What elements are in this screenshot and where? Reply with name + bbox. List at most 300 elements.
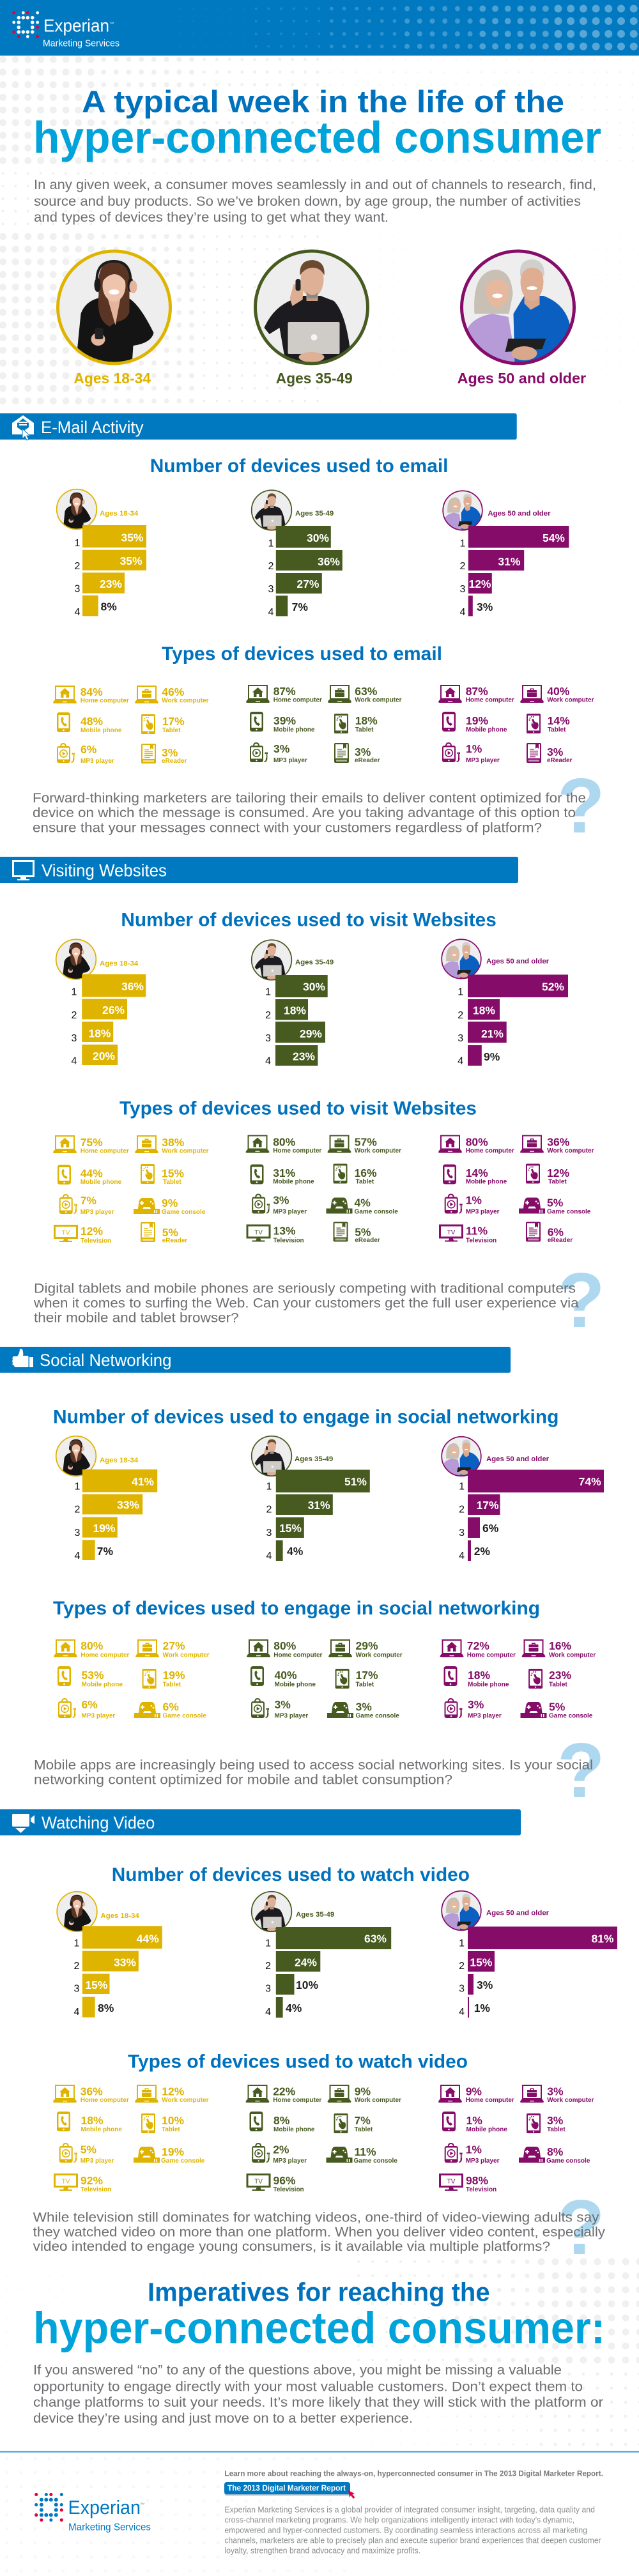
footer about text: loyalty, strengthen brand advocacy and maximize profits. <box>224 2547 420 2556</box>
bar chart: websites, ages 50 and older: 18% <box>473 1004 495 1017</box>
bar chart: video, ages 35-49: 3 <box>265 1984 271 1995</box>
mobile phone 8%: Mobile phone <box>273 2126 315 2133</box>
bar chart: email, ages 50 and older: 4 <box>460 607 466 618</box>
heading: imperatives: Imperatives for reaching the <box>148 2277 490 2306</box>
game console 9% <box>134 1197 206 1216</box>
tablet 18%: Tablet <box>355 726 374 733</box>
work computer 38% <box>135 1135 209 1155</box>
heading: number of devices used to engage in social networking: Number of devices used to engage in social networking <box>53 1407 558 1428</box>
television 12%: 12% <box>81 1225 103 1238</box>
bar chart: social, ages 50 and older: 17% <box>477 1499 499 1512</box>
home computer 87%: 87% <box>273 685 296 698</box>
footer logo: Marketing Services <box>68 2522 151 2533</box>
bar chart: social, ages 18-34 <box>56 1436 157 1561</box>
section banner: visiting websites <box>0 857 518 883</box>
bar chart: social, ages 50 and older: 1 <box>459 1481 465 1492</box>
footer call to action <box>224 2469 603 2499</box>
bar chart: email, ages 18-34: 1 <box>75 538 81 549</box>
work computer 38%: Work computer <box>162 1148 209 1155</box>
tablet 19% <box>142 1669 185 1689</box>
mobile phone 39%: 39% <box>273 714 296 727</box>
television 11%: TV <box>447 1229 456 1236</box>
home computer 72% <box>440 1639 516 1659</box>
work computer 36%: Work computer <box>547 1147 594 1154</box>
bar chart: email, ages 50 and older: 3% <box>477 601 493 613</box>
television 12% <box>54 1225 111 1245</box>
MP3 player 1% <box>445 1193 500 1215</box>
game console 6%: 6% <box>162 1701 179 1713</box>
mobile phone 18%: 18% <box>81 2114 104 2127</box>
work computer 57%: 57% <box>355 1136 377 1149</box>
section banner: e-mail activity <box>0 413 517 440</box>
bar chart: websites, ages 35-49: 18% <box>284 1004 306 1017</box>
work computer 9% <box>327 2085 401 2104</box>
work computer 3%: Work computer <box>547 2097 594 2104</box>
mobile phone 53%: Mobile phone <box>82 1682 123 1688</box>
callout: websites question: Digital tablets and mobile phones are seriously competing with traditional computers <box>34 1280 576 1296</box>
icon: video camera <box>12 1814 35 1833</box>
text block: imperatives: opportunity to engage directly with your most valuable customers. Don’t expect them to <box>33 2379 583 2394</box>
work computer 29% <box>328 1639 403 1659</box>
tablet 18%: 18% <box>355 714 378 727</box>
MP3 player 2%: MP3 player <box>273 2158 307 2165</box>
bar chart: social, ages 18-34: Ages 18-34 <box>100 1457 139 1464</box>
callout: email question: ? <box>557 762 605 849</box>
bar chart: video, ages 35-49: 63% <box>364 1932 387 1945</box>
television 98% <box>439 2174 497 2193</box>
game console 8%: Game console <box>546 2158 590 2165</box>
work computer 29%: 29% <box>355 1639 378 1652</box>
MP3 player 5% <box>59 2143 114 2165</box>
MP3 player 1% <box>445 2143 500 2165</box>
bar chart: video, ages 50 and older: 1% <box>474 2002 490 2014</box>
MP3 player 3%: MP3 player <box>275 1713 308 1720</box>
bar chart: email, ages 35-49: Ages 35-49 <box>295 510 334 518</box>
bar chart: video, ages 35-49: 1 <box>265 1938 271 1949</box>
home computer 84%: Home computer <box>81 697 129 704</box>
bar chart: video, ages 35-49: 4% <box>286 2002 302 2014</box>
tablet 17%: Tablet <box>355 1682 374 1688</box>
mobile phone 31%: Mobile phone <box>273 1178 314 1186</box>
home computer 9%: Home computer <box>466 2097 514 2104</box>
game console 5% <box>519 1196 591 1215</box>
tablet 15%: 15% <box>162 1167 184 1180</box>
television 11%: Television <box>466 1237 497 1245</box>
heading: types of devices used to engage in social networking: Types of devices used to engage in social networking <box>53 1598 540 1619</box>
game console 3% <box>327 1701 399 1720</box>
work computer 12%: 12% <box>162 2085 185 2097</box>
eReader 5%: 5% <box>162 1226 178 1239</box>
home computer 9% <box>438 2085 514 2104</box>
panel: social networking <box>0 1347 605 1814</box>
bar chart: websites, ages 35-49: 2 <box>265 1010 271 1021</box>
bar chart: video, ages 18-34: 1 <box>74 1938 80 1949</box>
bar chart: websites, ages 50 and older: Ages 50 and older <box>486 958 550 965</box>
bar chart: email, ages 50 and older <box>443 491 569 618</box>
bar chart: social, ages 50 and older: 2 <box>459 1505 465 1515</box>
home computer 87%: Home computer <box>466 696 514 703</box>
mobile phone 44%: 44% <box>81 1167 103 1180</box>
game console 3%: Game console <box>355 1713 399 1720</box>
device stats: video, ages 35-49 <box>245 2085 401 2193</box>
home computer 80%: Home computer <box>273 1147 321 1154</box>
work computer 63%: 63% <box>355 685 378 698</box>
bar chart: social, ages 18-34: 3 <box>75 1528 81 1538</box>
tablet 7% <box>334 2113 373 2133</box>
home computer 22%: 22% <box>273 2085 296 2097</box>
bar chart: email, ages 35-49: 36% <box>318 555 340 568</box>
home computer 80% <box>247 1639 323 1659</box>
eReader 3%: eReader <box>355 757 380 764</box>
home computer 22%: Home computer <box>273 2097 321 2104</box>
mobile phone 18%: Mobile phone <box>81 2126 122 2133</box>
game console 5% <box>520 1701 593 1720</box>
mobile phone 44%: Mobile phone <box>81 1179 122 1186</box>
eReader 3%: eReader <box>547 757 573 764</box>
bar chart: video, ages 18-34: 3 <box>74 1984 80 1995</box>
work computer 57% <box>327 1135 401 1154</box>
device stats: websites, ages 50 and older <box>438 1135 594 1245</box>
eReader 5%: eReader <box>355 1237 380 1244</box>
television 11%: 11% <box>466 1224 488 1237</box>
title: hyper-connected consumer <box>33 112 601 162</box>
intro text <box>34 177 596 225</box>
MP3 player 3% <box>250 742 307 764</box>
eReader 6% <box>526 1222 573 1244</box>
bar chart: video, ages 18-34: 8% <box>98 2002 114 2014</box>
bar chart: websites, ages 50 and older: 2 <box>458 1010 463 1021</box>
television 13% <box>247 1224 304 1245</box>
mobile phone 44% <box>58 1165 122 1186</box>
MP3 player 5%: MP3 player <box>81 2158 114 2165</box>
portrait: ages 35-49: Ages 35-49 <box>276 370 353 387</box>
MP3 player 5%: 5% <box>81 2143 96 2156</box>
panel: watching video <box>0 1809 617 2271</box>
text block: imperatives: If you answered “no” to any of the questions above, you might be missing a valuable <box>33 2363 562 2378</box>
bar chart: social, ages 18-34: 33% <box>117 1499 139 1512</box>
bar chart: social, ages 18-34: 1 <box>75 1481 81 1492</box>
game console 6% <box>134 1701 206 1720</box>
tablet 19%: 19% <box>162 1669 185 1682</box>
work computer 27%: Work computer <box>162 1652 210 1659</box>
bar chart: email, ages 18-34: 8% <box>101 601 117 613</box>
bar chart: websites, ages 18-34: 20% <box>93 1050 115 1062</box>
bar chart: websites, ages 50 and older: 52% <box>542 980 564 993</box>
section banner: e-mail activity: E-Mail Activity <box>41 418 144 437</box>
home computer 75% <box>53 1135 129 1155</box>
MP3 player 1%: MP3 player <box>466 2158 500 2165</box>
bar chart: email, ages 35-49: 2 <box>268 561 274 572</box>
tablet 16%: Tablet <box>355 1178 374 1186</box>
text block: imperatives: change platforms to suit your needs. It’s more likely that they will stick with the platform or <box>33 2395 603 2410</box>
home computer 9%: 9% <box>466 2085 482 2097</box>
section banner: watching video: Watching Video <box>42 1813 155 1832</box>
tablet 7%: 7% <box>354 2114 371 2127</box>
title: A typical week in the life of the <box>82 86 564 119</box>
mobile phone 14%: Mobile phone <box>466 1178 507 1186</box>
tablet 17%: 17% <box>355 1669 378 1682</box>
home computer 36% <box>53 2085 129 2104</box>
television 96%: TV <box>254 2179 263 2185</box>
tablet 17%: Tablet <box>162 727 181 734</box>
mobile phone 53%: 53% <box>82 1669 104 1682</box>
bar chart: websites, ages 35-49: 23% <box>293 1050 315 1063</box>
tablet 17%: 17% <box>162 715 185 728</box>
footer about text: cross-channel marketing programs. We help organizations intelligently interact with today’s dynamic, <box>224 2516 574 2525</box>
logo: Experian Marketing Services: SM <box>110 21 114 24</box>
tablet 14% <box>527 714 570 733</box>
mobile phone 31% <box>250 1164 314 1186</box>
work computer 16%: 16% <box>549 1639 571 1652</box>
MP3 player 1%: 1% <box>466 2143 482 2156</box>
bar chart: websites, ages 18-34: Ages 18-34 <box>100 960 139 968</box>
mobile phone 48% <box>57 712 122 734</box>
bar chart: websites, ages 50 and older <box>442 939 568 1067</box>
work computer 36%: 36% <box>547 1136 570 1149</box>
section banner: visiting websites: Visiting Websites <box>42 861 167 880</box>
mobile phone 14%: 14% <box>466 1167 488 1179</box>
header band with logo <box>0 0 639 56</box>
footer about text: Experian Marketing Services is a global provider of integrated consumer insight, targeting, data quality and <box>224 2506 595 2515</box>
bar chart: video, ages 18-34: Ages 18-34 <box>101 1912 139 1920</box>
MP3 player 2% <box>252 2143 307 2165</box>
bar chart: websites, ages 18-34: 3 <box>72 1033 77 1044</box>
game console 4%: 4% <box>354 1196 371 1209</box>
callout: video question: ? <box>557 2184 605 2271</box>
bar chart: social, ages 18-34: 19% <box>93 1522 116 1535</box>
mobile phone 48%: Mobile phone <box>81 727 122 734</box>
bar chart: social, ages 35-49: Ages 35-49 <box>295 1455 333 1463</box>
bar chart: video, ages 18-34 <box>57 1892 162 2018</box>
footer logo: Experian <box>68 2496 141 2518</box>
work computer 29%: Work computer <box>355 1652 403 1659</box>
television 92% <box>54 2174 111 2193</box>
television 13%: 13% <box>273 1224 296 1237</box>
bar chart: websites, ages 35-49: 3 <box>265 1033 271 1044</box>
bar chart: email, ages 35-49: 3 <box>268 584 274 595</box>
intro text: and types of devices they’re using to get what they want. <box>34 210 389 225</box>
tablet 3% <box>527 2113 566 2133</box>
section banner: watching video <box>0 1809 521 1836</box>
callout: video question: video intended to engage young consumers, is it available via multiple platforms? <box>33 2239 550 2254</box>
MP3 player 6% <box>57 743 114 765</box>
heading: number of devices used to email: Number of devices used to email <box>150 456 448 477</box>
bar chart: email, ages 35-49 <box>252 490 343 618</box>
work computer 46% <box>135 686 209 704</box>
footer about text <box>224 2506 601 2556</box>
age group portraits <box>58 251 586 387</box>
work computer 57%: Work computer <box>355 1147 401 1154</box>
television 96%: 96% <box>273 2174 296 2187</box>
bar chart: video, ages 50 and older <box>442 1891 617 2018</box>
device stats: video, ages 18-34 <box>53 2085 209 2193</box>
tablet 23%: 23% <box>549 1669 571 1682</box>
bar chart: email, ages 18-34: 23% <box>100 578 122 590</box>
portrait: ages 35-49 <box>256 251 368 387</box>
callout: websites question <box>33 1257 605 1344</box>
game console 19%: 19% <box>162 2145 184 2158</box>
device stats: video, ages 50 and older <box>438 2085 594 2193</box>
callout: video question: While television still dominates for watching videos, one-third of video-viewing adults say <box>33 2209 599 2225</box>
icon: monitor <box>12 860 35 880</box>
home computer 84% <box>53 686 129 704</box>
work computer 46%: Work computer <box>162 697 209 704</box>
television 92%: Television <box>81 2186 111 2193</box>
mobile phone 8%: 8% <box>273 2114 290 2127</box>
tablet 18% <box>334 714 378 733</box>
mobile phone 18% <box>57 2112 122 2133</box>
callout: email question <box>33 762 605 849</box>
eReader 3% <box>527 743 573 764</box>
eReader 3%: 3% <box>547 746 564 758</box>
bar chart: social, ages 50 and older <box>442 1437 604 1561</box>
work computer 40%: 40% <box>547 685 570 698</box>
MP3 player 1%: 1% <box>466 742 482 755</box>
eReader 3% <box>141 744 187 765</box>
tablet 23%: Tablet <box>549 1682 567 1688</box>
callout: websites question: ? <box>557 1257 605 1344</box>
work computer 27% <box>135 1639 210 1659</box>
icon: red cursor arrow <box>348 2490 355 2499</box>
bar chart: social, ages 35-49: 31% <box>308 1499 330 1512</box>
bar chart: websites, ages 18-34 <box>56 939 146 1067</box>
heading: imperatives <box>33 2277 605 2353</box>
mobile phone 39%: Mobile phone <box>273 726 315 733</box>
eReader 5% <box>141 1222 187 1245</box>
portrait: ages 18-34 <box>58 251 170 387</box>
device stats: email, ages 18-34 <box>53 686 209 765</box>
bar chart: social, ages 35-49: 3 <box>266 1528 272 1538</box>
bar chart: email, ages 35-49: 30% <box>307 532 329 544</box>
bar chart: email, ages 18-34: Ages 18-34 <box>100 510 139 518</box>
mobile phone 8% <box>249 2112 315 2133</box>
MP3 player 3%: MP3 player <box>273 757 307 764</box>
bar chart: social, ages 18-34: 41% <box>132 1475 154 1488</box>
eReader 5%: 5% <box>355 1225 371 1238</box>
eReader 5% <box>334 1222 380 1244</box>
tablet 12%: Tablet <box>548 1178 567 1186</box>
game console 5%: 5% <box>547 1196 564 1209</box>
intro text: source and buy products. So we’ve broken down, by age group, the number of activities <box>34 194 581 209</box>
television 13%: Television <box>273 1237 304 1245</box>
bar chart: websites, ages 35-49 <box>252 940 334 1067</box>
callout: social question: networking content optimized for mobile and tablet consumption? <box>34 1772 452 1787</box>
bar chart: websites, ages 35-49: 29% <box>300 1027 322 1040</box>
bar chart: video, ages 50 and older: 2 <box>459 1961 465 1972</box>
logo: Experian Marketing Services: Experian <box>43 15 109 35</box>
bar chart: email, ages 18-34: 3 <box>75 584 81 595</box>
tablet 10%: Tablet <box>162 2126 180 2133</box>
television 98%: Television <box>466 2186 497 2193</box>
bar chart: video, ages 35-49: 2 <box>265 1961 271 1972</box>
bar chart: websites, ages 18-34: 18% <box>88 1027 111 1040</box>
home computer 72%: Home computer <box>467 1652 516 1659</box>
home computer 75%: 75% <box>81 1136 103 1149</box>
MP3 player 7% <box>59 1194 114 1216</box>
mobile phone 31%: 31% <box>273 1167 296 1179</box>
home computer 80% <box>245 1135 321 1154</box>
work computer 3% <box>520 2085 594 2104</box>
television 96%: Television <box>273 2186 304 2193</box>
bar chart: social, ages 35-49: 15% <box>279 1522 302 1535</box>
bar chart: websites, ages 35-49: 1 <box>265 987 271 998</box>
work computer 12% <box>135 2085 209 2104</box>
television 92%: 92% <box>81 2174 103 2187</box>
callout: websites question: their mobile and tablet browser? <box>34 1310 239 1325</box>
game console 8%: 8% <box>547 2145 564 2158</box>
game console 11%: Game console <box>354 2158 397 2165</box>
bar chart: websites, ages 18-34: 36% <box>121 980 144 993</box>
MP3 player 6%: 6% <box>82 1698 98 1711</box>
button: the 2013 digital marketer report <box>224 2482 350 2496</box>
callout: video question <box>33 2184 605 2271</box>
home computer 87% <box>246 685 322 703</box>
bar chart: websites, ages 18-34: 26% <box>102 1004 125 1016</box>
bar chart: video, ages 18-34: 15% <box>85 1979 108 1991</box>
heading: number of devices used to visit websites: Number of devices used to visit Websites <box>121 910 497 930</box>
work computer 63% <box>328 685 402 703</box>
game console 5%: 5% <box>549 1701 566 1713</box>
bar chart: video, ages 50 and older: 4 <box>459 2007 465 2018</box>
bar chart: email, ages 50 and older: 3 <box>460 584 466 595</box>
bar chart: email, ages 18-34 <box>57 489 146 618</box>
bar chart: social, ages 50 and older: 3 <box>459 1528 465 1538</box>
bar chart: video, ages 18-34: 4 <box>74 2007 80 2018</box>
footer logo: SM <box>141 2502 144 2505</box>
bar chart: social, ages 50 and older: 4 <box>459 1551 465 1561</box>
MP3 player 3%: 3% <box>273 1193 289 1206</box>
mobile phone 19%: Mobile phone <box>466 726 507 733</box>
home computer 87%: Home computer <box>273 696 322 703</box>
bar chart: websites, ages 35-49: 30% <box>303 980 325 993</box>
bar chart: email, ages 50 and older: 31% <box>498 555 521 568</box>
bar chart: email, ages 50 and older: 54% <box>543 532 565 544</box>
mobile phone 40% <box>250 1666 316 1688</box>
game console 6%: Game console <box>162 1713 206 1720</box>
MP3 player 1% <box>442 742 500 764</box>
panel: visiting websites <box>0 857 605 1344</box>
bar chart: websites, ages 35-49: 4 <box>265 1056 271 1067</box>
bar chart: social, ages 35-49: 1 <box>266 1481 272 1492</box>
mobile phone 53% <box>58 1666 123 1688</box>
home computer 36%: 36% <box>81 2085 103 2097</box>
device stats: social, ages 50 and older <box>440 1639 596 1720</box>
heading: number of devices used to watch video: Number of devices used to watch video <box>112 1864 470 1885</box>
MP3 player 1%: 1% <box>466 1193 482 1206</box>
tablet 16% <box>334 1164 377 1186</box>
eReader 3% <box>334 743 380 764</box>
bar chart: video, ages 18-34: 44% <box>137 1932 159 1945</box>
television 98%: TV <box>447 2179 456 2185</box>
game console 4%: Game console <box>354 1209 398 1215</box>
home computer 22% <box>245 2085 321 2104</box>
tablet 16%: 16% <box>354 1167 377 1179</box>
bar chart: email, ages 35-49: 1 <box>268 539 274 549</box>
work computer 46%: 46% <box>162 686 185 698</box>
game console 3%: 3% <box>355 1701 372 1713</box>
home computer 36%: Home computer <box>81 2097 129 2104</box>
footer about text: channels, marketers are able to precisely plan and execute superior brand experiences that deepen customer <box>224 2536 601 2545</box>
bar chart: email, ages 35-49: 27% <box>296 578 320 590</box>
bar chart: email, ages 50 and older: 2 <box>460 561 466 572</box>
bar chart: social, ages 35-49: 4 <box>266 1551 272 1561</box>
MP3 player 7%: MP3 player <box>81 1209 114 1216</box>
tablet 14%: 14% <box>548 714 570 727</box>
text block: imperatives <box>33 2363 603 2426</box>
tablet 10% <box>141 2113 184 2133</box>
callout: social question: ? <box>557 1727 605 1814</box>
bar chart: video, ages 50 and older: 3% <box>477 1979 493 1991</box>
